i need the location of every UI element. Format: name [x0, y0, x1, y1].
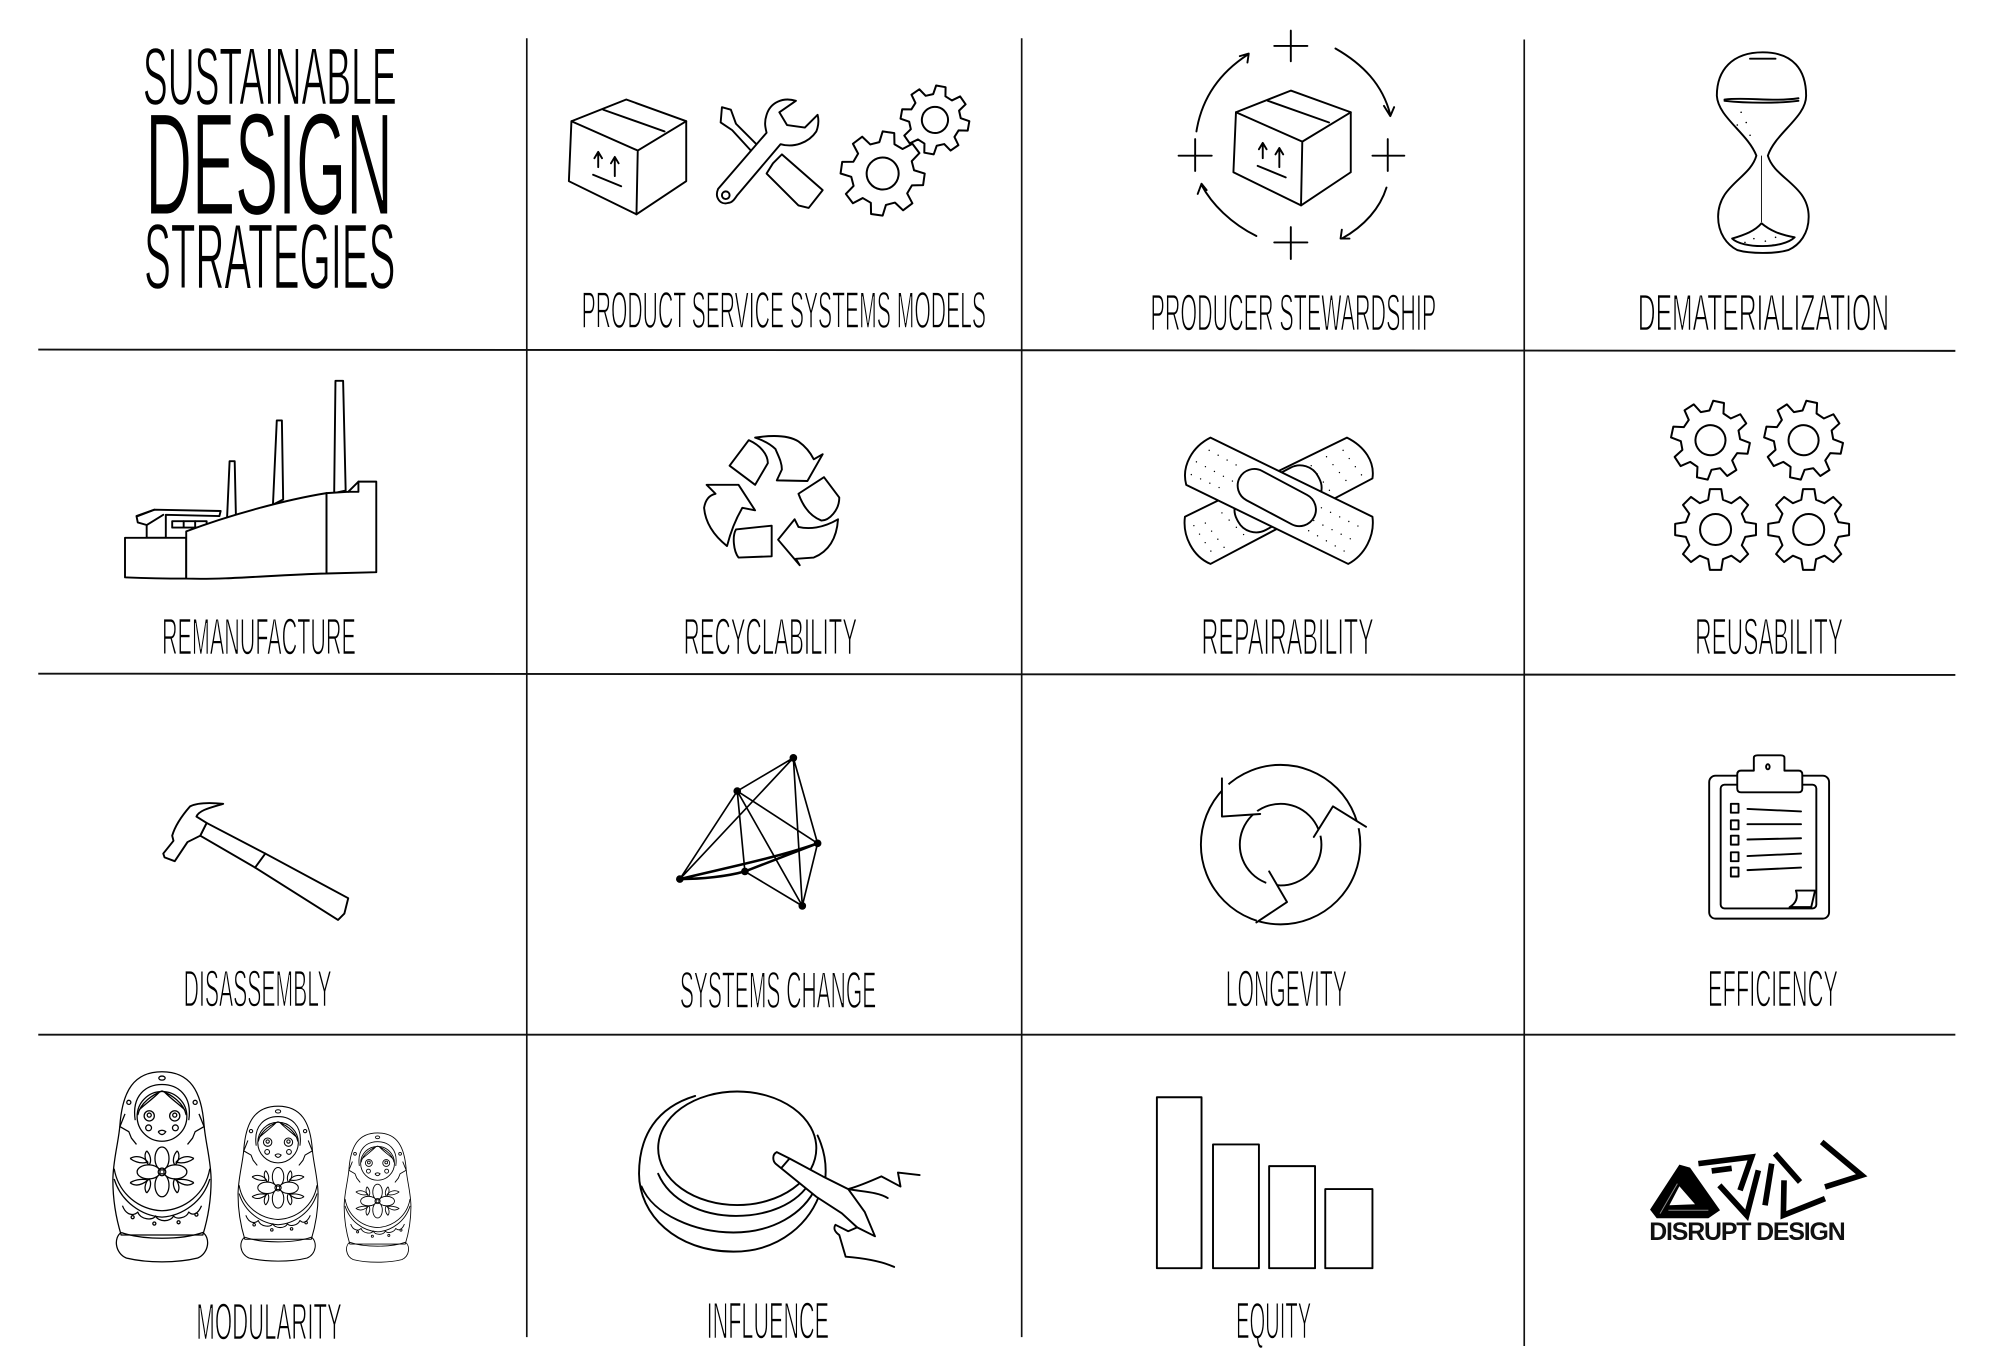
- text: PRODUCT SERVICE SYSTEMS MODELS: [582, 282, 986, 340]
- panel: longevity: [1201, 765, 1366, 1019]
- icon: circular arrows: [1201, 765, 1366, 924]
- panel: disassembly: [163, 803, 348, 1019]
- panel: product service systems models: [569, 80, 986, 340]
- text: SYSTEMS CHANGE: [680, 962, 876, 1020]
- text: RECYCLABILITY: [684, 609, 857, 667]
- icon: four gears: [1664, 394, 1850, 570]
- panel: equity: EQUITY: [1236, 1292, 1311, 1350]
- text: STRATEGIES: [144, 204, 395, 308]
- icon: hourglass: [1717, 52, 1809, 253]
- text: PRODUCER STEWARDSHIP: [1151, 284, 1436, 342]
- icon: factory: [125, 381, 376, 579]
- panel: producer stewardship: [1151, 31, 1436, 342]
- panel: repairability: [1185, 438, 1374, 667]
- panel: efficiency: [1708, 755, 1838, 1019]
- icon: nesting dolls: [113, 1072, 411, 1262]
- panel: equity: [1157, 1097, 1372, 1350]
- text: DESIGN: [145, 82, 393, 245]
- panel: dematerialization: [1638, 52, 1889, 342]
- icon: clipboard checklist: [1709, 755, 1829, 919]
- text: REPAIRABILITY: [1202, 609, 1374, 667]
- panel: systems change: [676, 754, 876, 1020]
- panel: remanufacture: [125, 381, 376, 667]
- icon: disrupt design mark: [1650, 1142, 1862, 1218]
- logo wordmark: DISRUPT DESIGN: [1649, 1218, 1846, 1246]
- panel: logo: [1649, 1142, 1862, 1246]
- panel: influence: [639, 1092, 920, 1350]
- text: SUSTAINABLE: [143, 32, 397, 123]
- panel: recyclability: [684, 436, 857, 667]
- icon: button pressed by hand: [639, 1092, 920, 1267]
- icon: network graph: [676, 754, 821, 910]
- icon: box wrench and gears: [569, 80, 974, 221]
- panel: modularity: [113, 1072, 411, 1352]
- icon: recycling arrows: [704, 436, 839, 565]
- icon: box with circular arrows and plus signs: [1179, 31, 1404, 259]
- panel: reusability: [1664, 394, 1850, 667]
- icon: crossed bandages: [1185, 438, 1373, 564]
- text: LONGEVITY: [1226, 961, 1347, 1019]
- text: DISASSEMBLY: [184, 961, 332, 1019]
- panel: modularity: MODULARITY: [196, 1294, 342, 1352]
- title: [143, 32, 397, 308]
- text: REMANUFACTURE: [162, 609, 356, 667]
- icon: hammer: [163, 803, 348, 920]
- panel: influence: INFLUENCE: [707, 1292, 829, 1350]
- icon: descending bar chart: [1157, 1097, 1372, 1268]
